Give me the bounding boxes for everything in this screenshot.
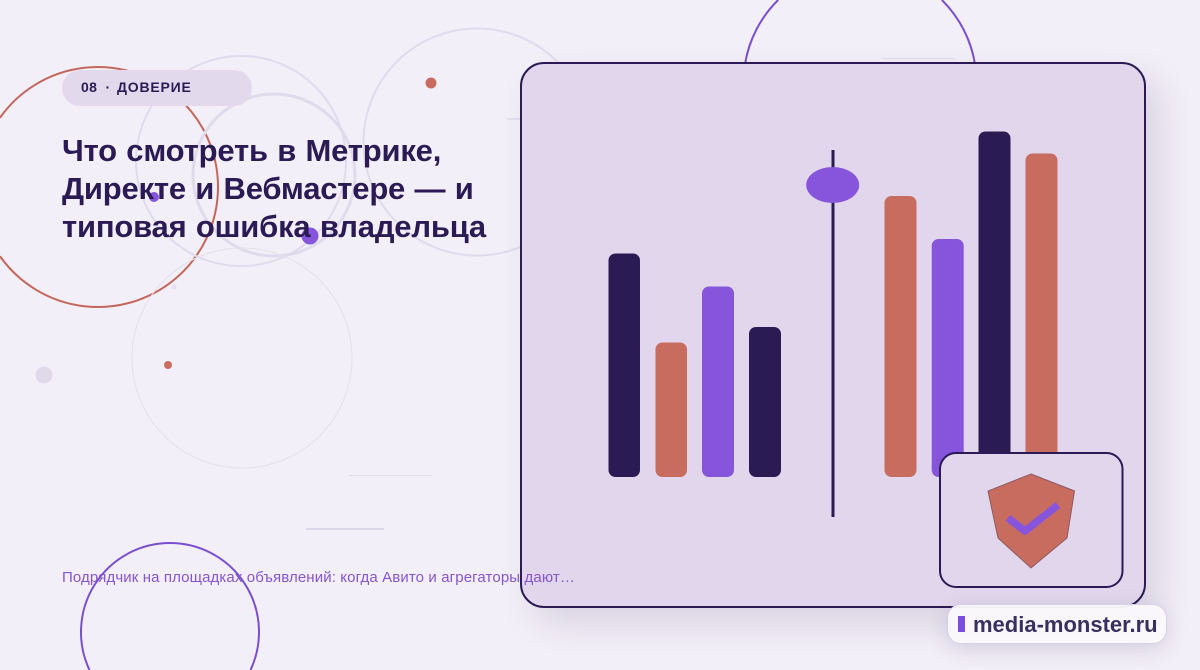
bar: right 2 <box>932 239 964 477</box>
dot: purple medium <box>302 228 318 244</box>
title: Что смотреть в Метрике, <box>62 133 441 168</box>
icon: check mark <box>1008 505 1058 531</box>
inset card background <box>940 453 1122 587</box>
watermark text: media-monster.ru <box>973 612 1158 637</box>
icon: shield <box>988 474 1074 568</box>
axis line <box>832 150 834 517</box>
circle: lilac inner <box>193 94 355 256</box>
dot: pale <box>172 284 176 290</box>
bar: right 1 <box>884 196 916 477</box>
title <box>62 133 486 244</box>
dot: coral top <box>426 78 436 88</box>
dot: lilac <box>36 366 52 384</box>
panel: chart illustration <box>520 62 1146 608</box>
watermark badge <box>947 604 1167 644</box>
circle: pale grey <box>132 248 352 468</box>
bar: left 2 <box>656 342 687 477</box>
bar: right 3 <box>978 132 1010 477</box>
circle: purple bottom <box>81 543 259 670</box>
category label: ДОВЕРИЕ <box>117 79 192 95</box>
circle: coral outline <box>0 67 218 307</box>
subtitle: Подрядчик на площадках объявлений: когда Авито и агрегаторы дают… <box>62 569 575 586</box>
bar: left 1 <box>608 254 640 477</box>
watermark accent <box>958 616 965 632</box>
category label: · <box>106 79 110 95</box>
title: типовая ошибка владельца <box>62 209 486 244</box>
dot: purple small <box>149 192 159 202</box>
category label <box>81 79 192 95</box>
bar: left 4 <box>749 327 781 477</box>
category label: 08 <box>81 79 97 95</box>
circle: lilac right <box>364 28 590 256</box>
dot: coral small <box>164 361 172 369</box>
circle: purple top <box>745 0 975 64</box>
bar: left 3 <box>702 286 734 477</box>
circle: lilac large <box>136 56 346 266</box>
title: Директе и Вебмастере — и <box>62 171 474 206</box>
axis marker <box>806 167 859 203</box>
bar: right 4 <box>1026 154 1058 477</box>
category pill <box>62 70 252 106</box>
